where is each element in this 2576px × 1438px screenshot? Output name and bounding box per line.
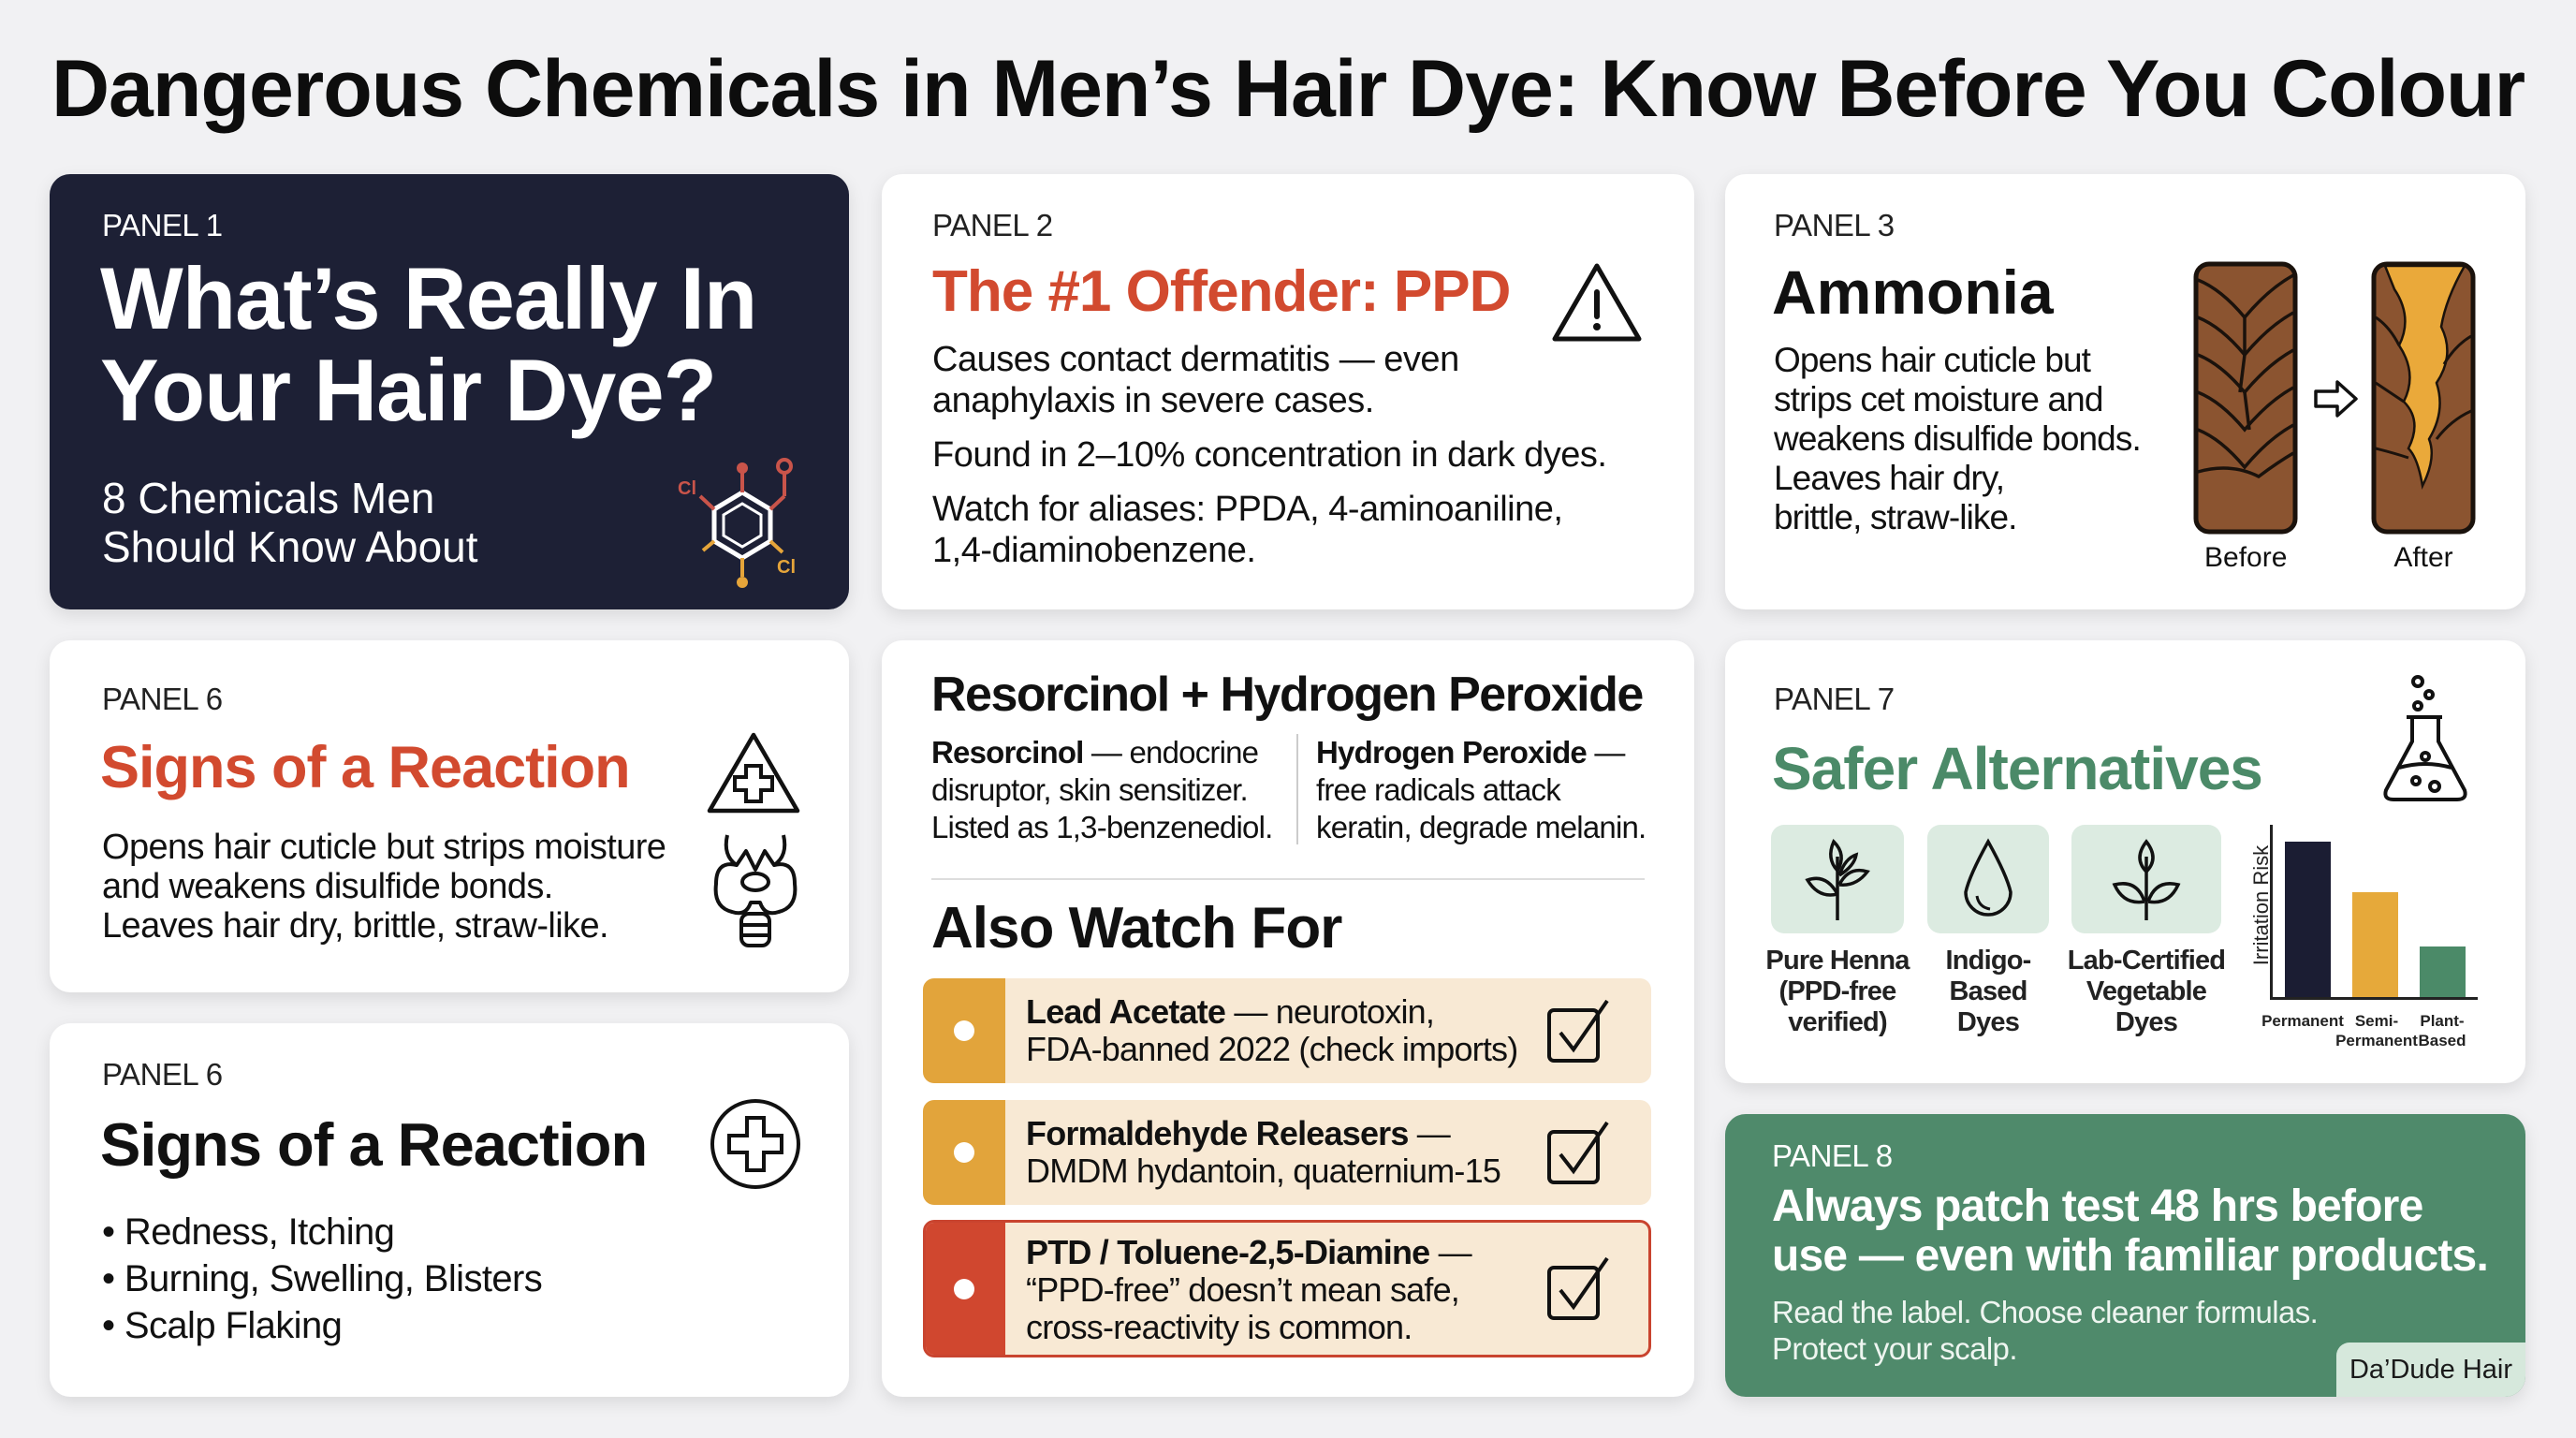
alternative labels: Pure Henna [1765, 946, 1910, 976]
resorcinol column: Resorcinol — endocrine [931, 735, 1258, 770]
bar chart: irritation risk [2249, 825, 2478, 1049]
panel 2: PPD [882, 174, 1694, 609]
icon: triangle cross [708, 732, 799, 813]
panel 2: PPD: 1,4-diaminobenzene. [932, 531, 1255, 570]
panel 8 subtext: Protect your scalp. [1772, 1331, 2017, 1366]
item: lead acetate: Lead Acetate — neurotoxin, [1026, 992, 1434, 1031]
illustration: hair after [2372, 262, 2475, 534]
panel 7 label: PANEL 7 [1774, 682, 1895, 716]
alternative: indigo [1927, 825, 2049, 933]
alternative labels [1765, 946, 1910, 1037]
panel 1 subtitle: 8 Chemicals Men [102, 474, 434, 522]
panel 2 label: PANEL 2 [932, 208, 1053, 242]
symptom bullet list: • Scalp Flaking [102, 1305, 342, 1346]
bar chart: irritation risk: Permanent [2335, 1032, 2418, 1049]
icon: circle cross [710, 1099, 800, 1189]
resorcinol heading: Resorcinol + Hydrogen Peroxide [931, 668, 1643, 722]
panel 6a body text [102, 828, 666, 946]
alternative: vegetable dyes [2071, 825, 2221, 933]
panel 6b: signs of a reaction list [50, 1023, 849, 1397]
panel 3 body text: brittle, straw-like. [1774, 498, 2017, 536]
brand badge [2336, 1343, 2525, 1397]
hydrogen peroxide column: free radicals attack [1316, 772, 1560, 807]
panel 7: safer alternatives: Based [1949, 976, 2027, 1006]
alternative: pure henna [1771, 825, 1904, 933]
panel 2 body text [932, 340, 1459, 420]
panel 2 body text: anaphylaxis in severe cases. [932, 381, 1374, 420]
item: PTD toluene: PTD / Toluene-2,5-Diamine — [1026, 1233, 1471, 1271]
panel 3 heading: Ammonia [1772, 257, 2054, 327]
panel 2 body text: Causes contact dermatitis — even [932, 340, 1459, 379]
panel 3 body text: weakens disulfide bonds. [1774, 419, 2141, 458]
panel 7: safer alternatives [1725, 640, 2525, 1083]
panel 8 subtext [1772, 1295, 2318, 1366]
panel 3: ammonia [1725, 174, 2525, 609]
item: lead acetate [923, 978, 1651, 1083]
alternative labels: verified) [1788, 1007, 1887, 1037]
resorcinol column [931, 735, 1272, 844]
panel 6a label: PANEL 6 [102, 682, 223, 716]
panel 6a body text: and weakens disulfide bonds. [102, 867, 553, 906]
panel: resorcinol + also watch for [882, 640, 1694, 1397]
brand badge: Da’Dude Hair [2349, 1355, 2512, 1385]
panel 3 body text: Leaves hair dry, [1774, 459, 2004, 497]
panel 1 label: PANEL 1 [102, 208, 223, 242]
panel 6a: signs of a reaction [50, 640, 849, 992]
panel 7: safer alternatives: Lab-Certified [2068, 946, 2225, 976]
item: lead acetate: FDA-banned 2022 (check imports) [1026, 1030, 1517, 1068]
icon: molecule: Cl [777, 557, 796, 578]
panel 1 subtitle: Should Know About [102, 522, 478, 571]
alternative labels: (PPD-free [1779, 976, 1895, 1006]
illustration: hair before [2194, 262, 2297, 534]
panel 3 body text: strips cet moisture and [1774, 380, 2103, 418]
item: PTD toluene: “PPD-free” doesn’t mean safe, [1026, 1270, 1459, 1309]
item: formaldehyde releasers: Formaldehyde Releasers — [1026, 1114, 1450, 1152]
icon: warning triangle [1552, 264, 1642, 341]
resorcinol column: disruptor, skin sensitizer. [931, 772, 1248, 807]
panel 6a heading: Signs of a Reaction [100, 735, 630, 800]
panel 7: safer alternatives: Dyes [1957, 1007, 2019, 1037]
bar chart: irritation risk: Permanent [2261, 1012, 2344, 1030]
item: formaldehyde releasers: DMDM hydantoin, quaternium-15 [1026, 1152, 1500, 1190]
panel 1 heading: Your Hair Dye? [100, 341, 716, 439]
panel 1 heading: What’s Really In [100, 249, 756, 347]
panel 1 heading [100, 249, 756, 439]
symptom bullet list: • Burning, Swelling, Blisters [102, 1258, 542, 1299]
bar chart: irritation risk: Irritation Risk [2249, 845, 2273, 965]
resorcinol column: Listed as 1,3-benzenediol. [931, 810, 1272, 844]
panel 7: safer alternatives: Indigo- [1945, 946, 2031, 976]
also watch for heading: Also Watch For [931, 896, 1341, 961]
panel 2: PPD: Watch for aliases: PPDA, 4-aminoaniline, [932, 490, 1562, 529]
panel 8 headline [1772, 1181, 2488, 1281]
arrow [2314, 380, 2358, 418]
panel 6a body text: Leaves hair dry, brittle, straw-like. [102, 906, 608, 946]
item: formaldehyde releasers [923, 1100, 1651, 1205]
panel 7: safer alternatives: Vegetable [2086, 976, 2206, 1006]
panel 6a body text: Opens hair cuticle but strips moisture [102, 828, 666, 867]
panel 3 body text: Opens hair cuticle but [1774, 341, 2090, 379]
panel 3: ammonia: After [2393, 542, 2453, 573]
panel 7: safer alternatives: Dyes [2115, 1007, 2177, 1037]
icon: flask [2383, 675, 2467, 801]
hydrogen peroxide column: keratin, degrade melanin. [1316, 810, 1646, 844]
panel 1 subtitle [102, 474, 478, 571]
symptom bullet list [102, 1211, 542, 1346]
panel 8 subtext: Read the label. Choose cleaner formulas. [1772, 1295, 2318, 1329]
item: PTD toluene: cross-reactivity is common. [1026, 1308, 1412, 1346]
panel 3 label: PANEL 3 [1774, 208, 1895, 242]
symptom bullet list: • Redness, Itching [102, 1211, 394, 1253]
icon: molecule [678, 458, 796, 588]
hydrogen peroxide column: Hydrogen Peroxide — [1316, 735, 1625, 770]
bar chart: irritation risk: Plant- [2420, 1012, 2465, 1030]
panel 6b heading: Signs of a Reaction [100, 1110, 647, 1179]
panel 7 heading: Safer Alternatives [1772, 735, 2262, 802]
hydrogen peroxide column [1316, 735, 1646, 844]
title: Dangerous Chemicals in Men’s Hair Dye: Know Before You Colour [51, 44, 2525, 134]
labels before/after: Before [2204, 542, 2287, 573]
icon: thyroid [713, 835, 798, 947]
panel 8 headline: use — even with familiar products. [1772, 1231, 2488, 1281]
panel 3 body text [1774, 341, 2141, 536]
panel 8 headline: Always patch test 48 hrs before [1772, 1181, 2422, 1231]
panel 8 label: PANEL 8 [1772, 1138, 1893, 1173]
icon: molecule: Cl [678, 478, 696, 499]
panel 2: PPD: Found in 2–10% concentration in dark dyes. [932, 435, 1606, 475]
item: PTD toluene [923, 1220, 1651, 1357]
panel 8: patch test callout [1725, 1114, 2525, 1397]
panel 2 heading: The #1 Offender: PPD [932, 259, 1510, 324]
bar chart: irritation risk: Based [2418, 1032, 2466, 1049]
bar chart: irritation risk: Semi- [2355, 1012, 2398, 1030]
panel 6b label: PANEL 6 [102, 1057, 223, 1092]
panel 1: intro [50, 174, 849, 609]
